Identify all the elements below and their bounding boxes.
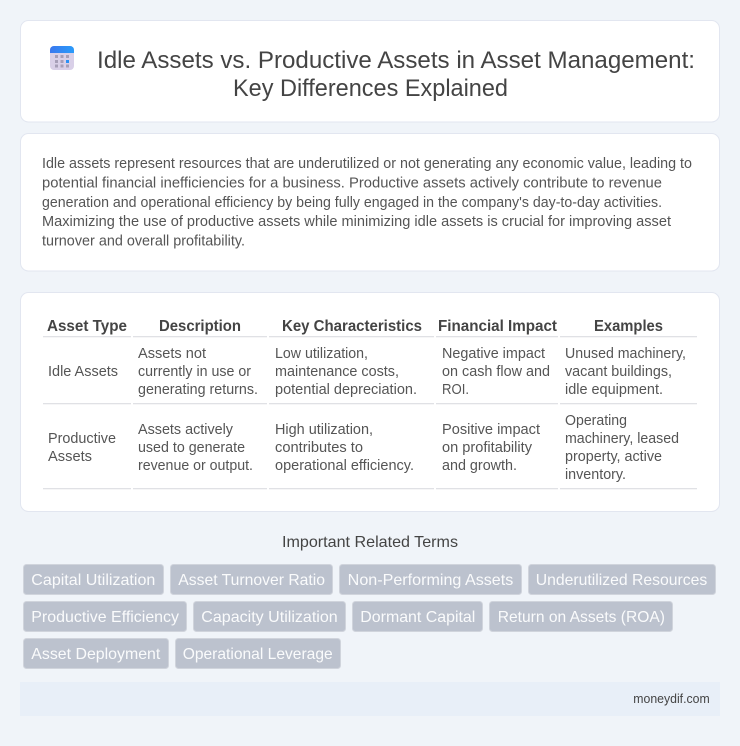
table row: idle assets: potential depreciation. (275, 382, 417, 398)
icon: calendar (50, 46, 74, 70)
related term tags: Asset Turnover Ratio (178, 572, 325, 589)
table row: idle assets: Negative impact (442, 346, 545, 362)
table row: idle assets: currently in use or (138, 364, 251, 380)
related term tags: Capital Utilization (31, 572, 155, 589)
table row: productive assets: Assets actively (138, 422, 234, 438)
table row: idle assets: Assets not (138, 346, 206, 362)
table header row: Asset Type (47, 318, 127, 335)
table row: idle assets: Low utilization, (275, 346, 368, 362)
panel: title header (20, 20, 720, 122)
table row: idle assets: Idle Assets (48, 364, 118, 380)
related term tags: Productive Efficiency (31, 609, 179, 626)
heading: important related terms: Important Related Terms (282, 534, 458, 551)
table header row: Description (159, 318, 241, 335)
table row: productive assets: revenue or output. (138, 458, 253, 474)
table row: idle assets: ROI. (442, 382, 469, 398)
table row: productive assets (43, 413, 697, 489)
footer bar: moneydif.com (633, 692, 710, 706)
table row: idle assets: idle equipment. (565, 382, 663, 398)
table row: idle assets: maintenance costs, (275, 364, 399, 380)
related term tags: Operational Leverage (183, 646, 333, 663)
table row: productive assets: Productive (48, 431, 116, 447)
panel: introduction text: generation and operational efficiency by being fully engaged in the company's day-to-day activities. (42, 195, 662, 211)
table header row: Key Characteristics (282, 318, 422, 335)
panel: comparison table (20, 292, 720, 512)
title (97, 47, 695, 102)
table header row: Examples (594, 318, 663, 335)
table row: productive assets: used to generate (138, 440, 245, 456)
related term tags: Non-Performing Assets (348, 572, 513, 589)
table row: idle assets (43, 346, 697, 404)
title: Idle Assets vs. Productive Assets in Asset Management: (97, 47, 695, 74)
table row: productive assets: Assets (48, 449, 92, 465)
related term tags: Capacity Utilization (201, 609, 338, 626)
related term tags: Asset Deployment (31, 646, 161, 663)
table row: idle assets: Unused machinery, (565, 346, 686, 362)
panel: introduction text: Idle assets represent resources that are underutilized or not generating any economic value, leading to (42, 156, 692, 172)
table row: productive assets: Operating (565, 413, 627, 429)
panel: introduction text: turnover and overall profitability. (42, 234, 245, 250)
title: Key Differences Explained (233, 75, 508, 102)
table header row (43, 318, 697, 337)
table row: idle assets: vacant buildings, (565, 364, 672, 380)
panel: introduction text: potential financial inefficiencies for a business. Productive assets actively contribute to revenue (42, 176, 662, 192)
table row: productive assets: High utilization, (275, 422, 373, 438)
table row: productive assets: machinery, leased (565, 431, 679, 447)
related term tags: Return on Assets (ROA) (498, 609, 665, 626)
table row: productive assets: Positive impact (442, 422, 540, 438)
table row: productive assets: inventory. (565, 467, 626, 483)
panel: introduction text: Maximizing the use of productive assets while minimizing idle assets is crucial for improving asset (42, 214, 671, 230)
related term tags: Underutilized Resources (536, 572, 707, 589)
table row: idle assets: on cash flow and (442, 364, 550, 380)
related term tags (24, 564, 716, 668)
panel: introduction text (20, 134, 720, 271)
table row: productive assets: contributes to (275, 440, 363, 456)
related term tags: Dormant Capital (360, 609, 475, 626)
footer bar (20, 682, 720, 716)
table row: idle assets: generating returns. (138, 382, 258, 398)
table row: productive assets: property, active (565, 449, 662, 465)
table row: productive assets: on profitability (442, 440, 533, 456)
table row: productive assets: operational efficiency. (275, 458, 414, 474)
table row: productive assets: and growth. (442, 458, 517, 474)
table header row: Financial Impact (438, 318, 558, 335)
